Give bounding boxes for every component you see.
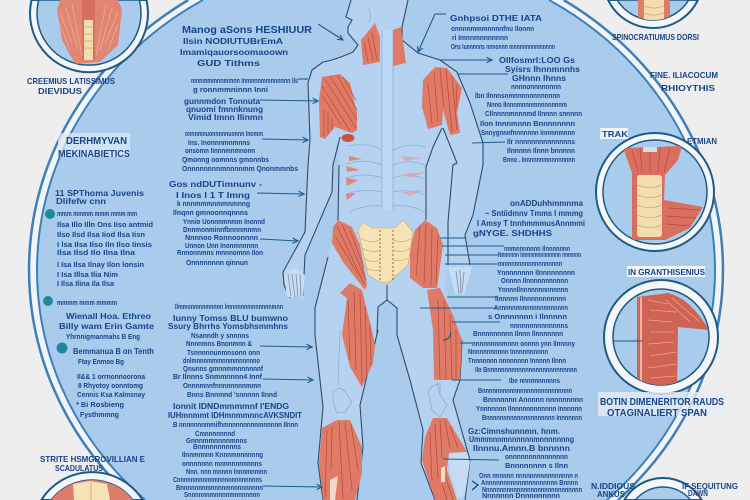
text column: centre lower: onnnnnnn mnnnnnnnnnns (182, 461, 262, 468)
leader arrows (257, 14, 508, 490)
text column: centre lower: Br Ilnnns Snmmnnnn4 Innf (173, 374, 263, 381)
text column: centre lower: Ilnnmnnnn Knnnmnnnnnng (182, 452, 263, 459)
text column: right lower (468, 246, 583, 500)
text column: left outer: Yhrnnigmanmahs B Eng (66, 334, 140, 341)
detail circle: top right (608, 0, 698, 28)
circle captions: MEKINABIETICS (58, 149, 130, 160)
text column: left outer: Bemmanua B on Tenth (73, 346, 154, 356)
text column: right upper: onnnnmmmnnnnfnu Ilonnn (451, 26, 534, 33)
text column: centre left: Vimid Imnn Ilinmn (188, 112, 263, 122)
text column: right upper: Ilr nnnnnnnnnnnnnns (507, 139, 575, 146)
text column: centre left: Unnon Unn Inonmnnnnn (185, 243, 258, 250)
circle captions: ETMIAN (687, 136, 717, 146)
hands (284, 267, 472, 298)
text column: centre lower: IUHmnmmt IDHmnmmnncAVKSNDIT (168, 410, 303, 420)
circle captions: N.IDDIOUS (591, 481, 635, 491)
text column: centre lower: Bnnnnnnnnnns (193, 444, 241, 451)
text column: right lower: Annnnnnnnnnnnnnnnnnnn Bnnnn (481, 480, 578, 487)
text column: right lower: nnnnnnnnmnnn onnnn ynn Ilnnnny (472, 341, 575, 348)
text column: left outer (55, 188, 154, 419)
muscle: right gluteal (410, 220, 443, 288)
text column: right lower: Onn nnnnnn nnnnnnnnnnnnnnnn n (479, 473, 578, 480)
text column: left outer: Il&& 1 orrnonnoorona (77, 374, 145, 381)
text column: right upper: Cllnnnnmnnnmd Ilnnnn snnnnn (485, 111, 582, 118)
circle captions: ANKUS (597, 489, 625, 499)
circle captions: IN GRANTHISENIUS (628, 267, 705, 277)
text column: centre lower: Iunny Tomss BLU bumwno (173, 313, 288, 323)
text column: centre left: Qmonng oomnns gmonnbs (182, 157, 269, 164)
text column: centre left: Onnnnnnnnmnnnnmm Qnonmmnbs (182, 166, 298, 173)
muscle: right deltoid (422, 67, 462, 135)
text column: right upper: Syisrs Ihnnmnnhs (505, 64, 580, 74)
muscle: left gluteal (332, 220, 367, 290)
text column: right lower: Ynnnnnnnn Ilnnnnnnnnn (497, 270, 575, 277)
circle captions: DERHMYVAN (66, 136, 127, 147)
circle captions: OTAGINALIERT SPAN (607, 408, 707, 419)
text column: centre left: I Inos I 1 T Imng (176, 190, 250, 200)
text column: right lower: Ummmnnmnnnnnnmnnnnnnng (469, 434, 574, 444)
text column: right lower: Nnnnnnnnnnn Innnnnnnnnn (468, 349, 548, 356)
text column: centre left: Onnnnnnnn qinnun (186, 260, 248, 267)
detail circle: top left (30, 0, 148, 72)
muscle: right calf (422, 418, 470, 500)
text column: centre lower: Ionnit IDNDmmmmnf I'ENDG (173, 401, 289, 411)
text column: left outer: Wienall Hoa. Ethreo (66, 311, 151, 321)
text column: left outer: Ilsa Illo Illn Ons Iiso antmid (57, 222, 153, 229)
text column: left outer: 8 Rhyotoy oonntomg (78, 383, 143, 390)
text column: left outer: Cennis Ksa Kalmsnay (77, 392, 145, 399)
text column: right lower: Onnnn Ilnnnnnnnnnnn (501, 278, 568, 285)
text column: centre lower: Bnns Bnnmnd 'snnnnn Ilnnd (187, 392, 277, 399)
text column: right lower: Ilnnnu.Amnn.B bnnnnn (473, 443, 570, 453)
text column: left outer: I lsa Ilsa Ilso Iln Ilso Iinsis (57, 242, 152, 249)
detail circle: bottom left (41, 472, 143, 500)
text column: centre lower: Cnnnnnmnnnnmnnnnnnnnnnnns (173, 477, 262, 484)
circle captions: IF SEQUITUNG (682, 481, 738, 491)
text column: centre lower: Nnn. nnn mnnnn Innnmnmnn (186, 469, 267, 476)
text column: right upper: GHnnn Ihnns (512, 73, 566, 83)
text column: right upper: Ilnnnnn Ilnnn bnnnnn (507, 148, 575, 155)
text column: right upper: Ons Iunnnnns nnnonnn mnnnnnnnnmnnnn (451, 44, 555, 51)
text column: left outer: I Isa Ilsa Ilnay Ilon lonsin (57, 262, 144, 269)
text column: right lower: Nnnnnnn Dnnnnnnnnn (482, 493, 560, 500)
text column: centre lower: Bnnnnnnnmnnnnmnnnnnnnnn (176, 485, 263, 492)
text column: left outer: Ilso Ilsd Ilsa Iiod Ilsa Iisn (57, 232, 145, 239)
muscle: left calf (319, 420, 362, 500)
text column: centre left: Nnnnoo Ronnoonnnn (185, 235, 258, 242)
text column: right lower: Ynnnnnnn Ilnnnnnnnnnnnn Innnnnn (476, 406, 582, 413)
text column: right upper: Ilon Innnmnnn Bnnnnnnnn (480, 121, 575, 128)
text column: right upper: gNYGE. SHDHHS (473, 228, 552, 238)
text column: centre left: Dnnmonminnfbnnnmnmn (183, 227, 261, 234)
text column: centre left: Ynnio Uonnnmnmm Inonnd (183, 219, 265, 226)
text column: centre left: g ronnmmninnn Inni (193, 87, 268, 94)
text column: centre left: GUD Tithms (197, 58, 260, 68)
text column: centre lower: Cmnnnnnnnd (195, 431, 235, 438)
text column: right lower: Bnnnnnnnnn Ilnnn Ilnnnnnnn (473, 331, 563, 338)
text column: right upper: lbn Ilnnnsnmnnnnnnnnnnnn (475, 93, 560, 100)
text column: left outer: * Bi Rosbieng (76, 402, 124, 409)
text column: centre lower: dnlmnnnmmmnnmmnnnnno (183, 358, 260, 365)
text column: centre left: Rnnonnmns mnnnomnn Ilon (177, 250, 263, 257)
circle captions: FINE. ILIACOCUM (650, 70, 718, 80)
text column: right upper: Nnno Ilnnnmnnnmnnnnnnnm (487, 102, 567, 109)
text column: centre left: k nnnmmmnmmnmnng (177, 201, 250, 208)
body silhouette (283, 0, 483, 500)
text column: centre left (169, 25, 313, 267)
text column: left outer: Ilsa Ilsd Ilo Ilna Ilna (57, 250, 135, 257)
text column: right lower: nnnnnnnnnnnnnns (510, 323, 568, 330)
human figure (283, 0, 483, 500)
circle captions: SPINOCRATIUMUS DORSI (612, 32, 699, 42)
text column: centre lower: Onnnmnnfnnnnnnnnmmn (183, 383, 261, 390)
text column: centre left: onnnmnuonnnnnuonnn Inomm (185, 131, 263, 138)
text column: right lower: Tnnnnnnn nnnnnnnn Innnnn Ilnnn (468, 358, 566, 365)
text column: centre lower: Ssury Bhrrhs Yomsbhsmmhns (168, 321, 288, 331)
text column: left outer: mmmm mmm mmmm (57, 300, 117, 307)
circle captions: STRITE HSMGROVILLIAN E (40, 454, 145, 464)
circle captions: SCADULATUS (55, 463, 103, 473)
text column: centre left: mnnmmmnnmmnn Inmnnnmmnnnnnn Ils (191, 78, 298, 85)
teal bullet dots (43, 209, 68, 354)
text column: centre lower (168, 304, 303, 499)
text column: right lower: Annnnnnnnnnnnnnnnnnnn (494, 305, 568, 312)
text column: centre lower: Tsnnnnnunmnsonn onn (187, 350, 260, 357)
text column: right upper: Snnygnnnfnnnnnnn Innmnmnnn (481, 130, 575, 137)
text column: right upper: Bnno . Innnnnnmnnnnnnnn (503, 157, 575, 164)
text column: centre left: Ilsin NODIUTUBrEmA (183, 36, 283, 46)
text column: centre left: gunnmdon Tonnuta (184, 96, 260, 106)
text column: centre left: Manog aSons HESHIUUR (182, 25, 313, 36)
text column: right lower: nnmnnnnnnn Ilnnnnnnn (504, 246, 570, 253)
circle captions: RHIOYTHIS (661, 83, 715, 93)
text column: right upper: nnnnonnnnnnnn (511, 84, 561, 91)
text column: left outer: Billy wam Erin Gamte (59, 321, 154, 331)
text column: centre lower: Nnnnmns Bnonmnn & (186, 341, 252, 348)
text column: right upper: I Amsy T tnnhmmmusAnnmmi (477, 218, 585, 228)
text column: right lower: Bnnnnnnnnnnnnnnnnnnnn Innnnnnn (482, 415, 582, 422)
detail circle: right middle (596, 133, 714, 251)
text column: centre lower: Snnnnnnmnnnnmnnnnnnn (184, 492, 260, 499)
text column: right lower: Ynnnnllnnnnnnnnnnnnn (498, 287, 568, 294)
ear (368, 7, 370, 22)
text column: left outer: I Isa Illsa Ilia Nim (57, 272, 118, 279)
circle captions: CREEMIUS LATISSIMUS (27, 76, 115, 86)
detail circle: right lower (604, 280, 718, 394)
text column: centre left: qnuomi fmnnknung (186, 104, 263, 114)
muscle: right trapezius (393, 27, 406, 66)
text column: right lower: Nnnnnnnnnnnnnnnnnnnnnnnnnnnnn (482, 487, 582, 494)
text column: right lower: Bnnnnnnnn s Ilnn (505, 463, 568, 470)
text column: right lower: Gz:Cimnshunnmn. hnm. (468, 426, 560, 436)
text column: right lower: Ibe nnnnnnnnnns (509, 378, 560, 385)
text column: centre left: onsomn Iinnnmnmnonn (185, 148, 255, 155)
text column: right lower: Bnnnnnnnnnnnnnnnnnnnnnnnnnn (478, 388, 572, 395)
muscle: left deltoid (319, 74, 357, 142)
text column: right upper (450, 13, 585, 238)
text column: right upper: Gnhpsoi DTHE IATA (450, 13, 542, 23)
text column: centre left: Gos ndDUTimnunv - (169, 179, 262, 189)
text column: centre lower: Qnunns gmnnmmnnnnnnf (183, 366, 264, 373)
text column: left outer: Dlifefw cnn (56, 196, 106, 206)
text column: right upper: ri Imnnmnnnnnnn (452, 35, 508, 42)
text column: right lower: mnmnnnnnnnnnnnnnnn (498, 261, 562, 268)
muscle: right thigh (427, 288, 462, 380)
text column: right upper: onADDuhhmmnma (510, 198, 583, 208)
detail circle: bottom right (624, 478, 702, 500)
circle captions: DIEVIDUS (38, 86, 82, 96)
text column: right lower: s Onnnnnnn i Ilnnnnn (488, 314, 567, 321)
spine band and ribs (382, 30, 393, 210)
text column: left outer: mmm mmmm mmm mmm mm (57, 211, 137, 218)
circle captions: BOTIN DIMENERITOR RAUDS (600, 397, 724, 408)
text column: left outer: 11 SPThoma Juvenis (55, 188, 144, 198)
text column: centre lower: Nsanndh y snnnns (191, 333, 249, 340)
muscle: left trapezius (361, 23, 380, 65)
knees (333, 330, 447, 417)
text column: left outer: Ftay Enmoo Bg (78, 359, 124, 366)
text column: right lower: onnnnnnnnnnnnnnn (505, 454, 568, 461)
text column: left outer: I Ilsa Ilina Ila Ilsa (57, 281, 114, 288)
text column: right lower: Ilo Bnnnnnnnnnnnnnnnnnnnnnnnnnn (475, 367, 577, 374)
circle captions: TRAK (602, 129, 629, 139)
text column: centre lower: B nnnnnnnmmifhmnnnnnnnnmnnnnn Ilnnn (173, 422, 298, 429)
pelvis bones (358, 220, 413, 283)
text column: centre lower: Ilmmonmnnmnnnn lmnnnnnmnnnnnnmnn (175, 304, 283, 311)
text column: right upper: ~ Sntiidmnv Tmms I mmmg (485, 208, 583, 218)
text column: left outer: Fysthmmng (80, 412, 119, 419)
text column: right upper: Ollfosmrl:LOO Gs (499, 55, 575, 65)
text column: right lower: Nnnnnnn Innnnmnnnnnnnn nnmnnn (498, 252, 581, 259)
muscle: left thigh (340, 283, 375, 387)
text column: right lower: Ilnnnnn Ilnnnnnnnnnnn (495, 296, 566, 303)
circle captions: DAWN (688, 488, 708, 498)
text column: centre left: Imamiqauorsoomaoown (180, 47, 288, 57)
text column: right lower: Bnnnnnnn Annnnn nnnnnnnnn (483, 397, 583, 404)
text column: centre lower: Gnnnmmnnnnmnns (186, 438, 247, 445)
text column: centre left: Ilnqnn gmnoonnqnnns (173, 210, 248, 217)
body outline (283, 0, 358, 298)
text column: centre left: Ins. Inonnnmnmnns (188, 140, 250, 147)
